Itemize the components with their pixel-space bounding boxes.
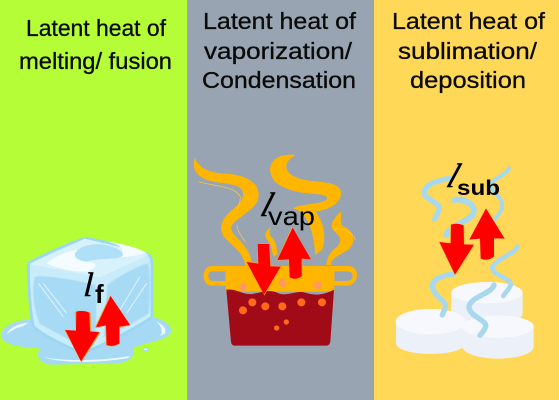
heading: vaporization / condensation: Condensation [202,67,356,93]
heading: melting / fusion [19,15,172,74]
vapour: lower wisps [432,247,517,335]
icon: boiling pot with steam [194,155,357,346]
steam: right plume [270,155,341,255]
vapour: upper wisps [424,168,509,235]
discs [451,282,523,323]
heading: vaporization / condensation: vaporization/ [204,38,353,64]
heading: vaporization / condensation: Latent heat of [203,8,357,34]
arrow: up and down, sublimation [438,208,505,276]
heading: melting / fusion: Latent heat of [26,15,167,41]
panel: sublimation / deposition [374,0,559,400]
symbol: l sub sub: l [442,157,465,195]
pot handles [204,266,357,286]
heading: vaporization / condensation [202,8,357,93]
panel: vaporization / condensation [187,0,374,400]
heading: sublimation / deposition [392,8,546,93]
arrow: up and down, melting [64,295,131,362]
symbol: l sub vap: l [256,186,278,224]
symbol: l sub f [82,267,104,309]
bubbles [239,298,326,331]
heading: sublimation / deposition: Latent heat of [392,8,546,34]
heading: sublimation / deposition: deposition [410,67,526,93]
pot upper band [226,266,334,292]
steam: left plume [194,157,259,266]
icon: melting ice cube [1,239,171,365]
panel: melting / fusion [0,0,187,400]
symbol: l sub sub: sub [457,177,500,200]
icon: dry ice discs with vapour [396,168,534,359]
heading: melting / fusion: melting/ fusion [19,48,172,74]
symbol: l sub f: l [82,267,94,304]
symbol: l sub f: f [95,279,104,309]
arrow: up and down, vaporization [246,227,312,296]
steam: small centre plume [265,227,278,257]
symbol: l sub vap: vap [268,201,315,231]
symbol: l sub sub [442,157,500,200]
heading: sublimation / deposition: sublimation/ [398,38,538,64]
pot body [226,289,334,346]
steam: small right plume [326,212,353,265]
symbol: l sub vap [256,186,315,231]
